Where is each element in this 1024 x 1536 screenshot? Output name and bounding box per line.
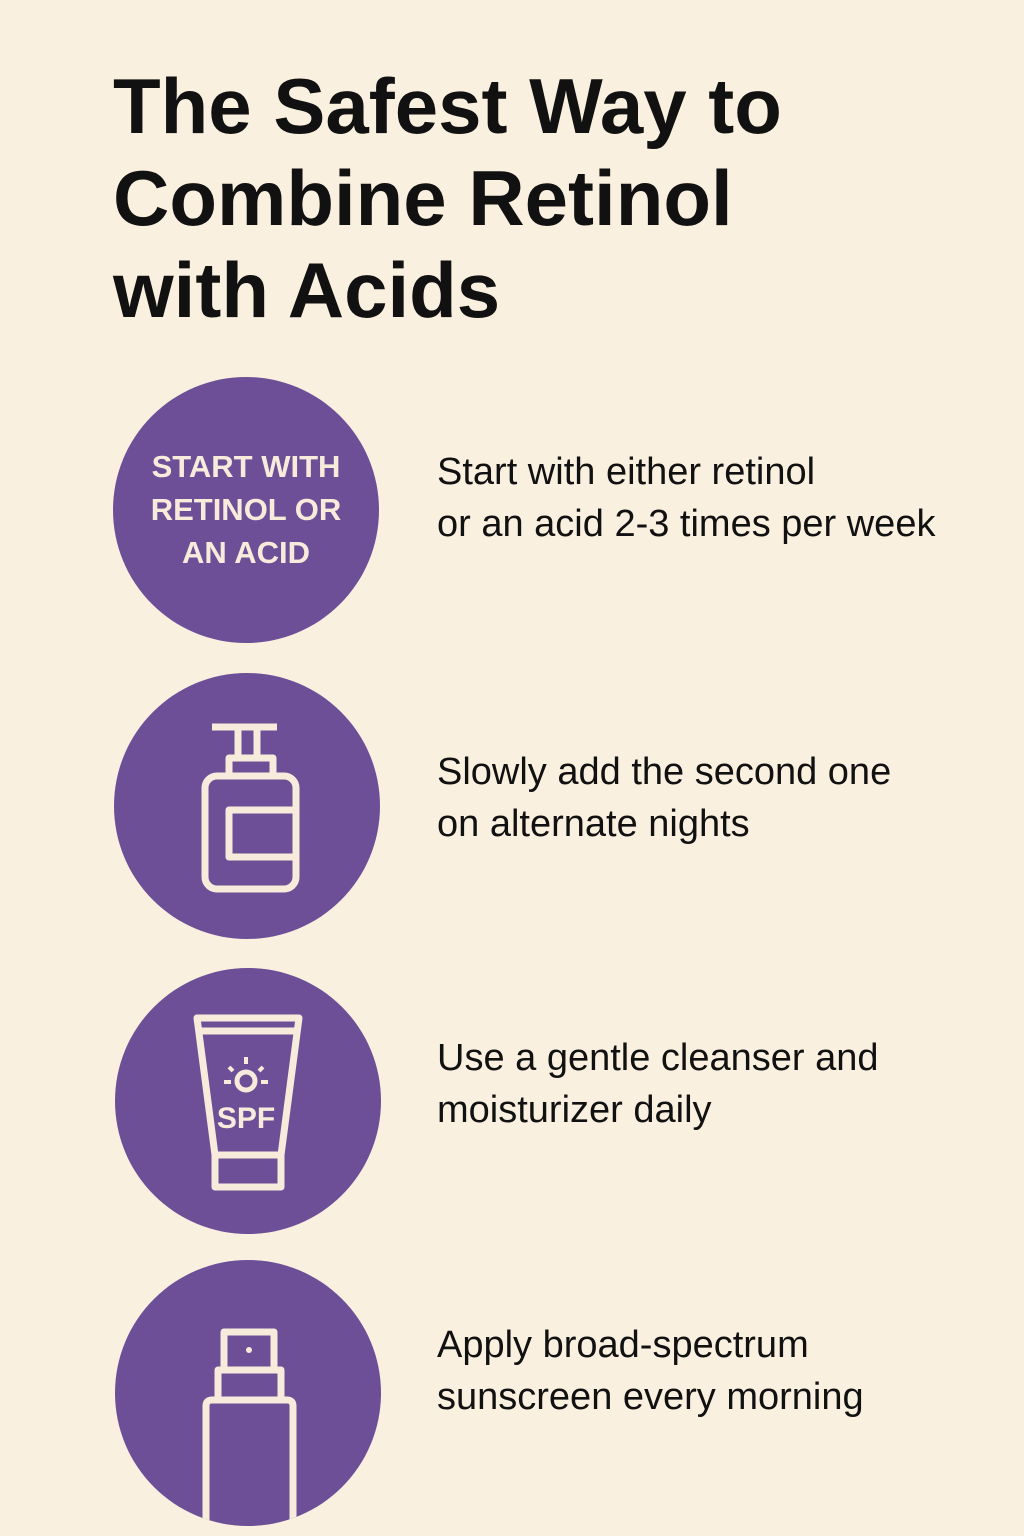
step 4 text: Apply broad-spectrum [437, 1324, 809, 1366]
icons [194, 724, 302, 1520]
step 4 circle [115, 1260, 381, 1526]
step 1 text: Start with either retinol [437, 451, 815, 493]
step 2 text: Slowly add the second one [437, 751, 891, 793]
step 2 text: on alternate nights [437, 803, 750, 845]
step 4 text: sunscreen every morning [437, 1376, 864, 1418]
icon: SPF tube: SPF [217, 1102, 275, 1135]
icon: spray bottle [206, 1332, 293, 1536]
step 1 circle: RETINOL OR [151, 492, 341, 527]
title: The Safest Way to [113, 62, 782, 150]
step 3 text: moisturizer daily [437, 1089, 712, 1131]
step 1 circle [113, 377, 379, 643]
step 2 text [437, 751, 891, 845]
step 2 circle [114, 673, 380, 939]
title [112, 62, 782, 334]
icon: pump bottle [205, 727, 296, 889]
step 1 circle: START WITH [152, 449, 340, 484]
step 3 text [437, 1037, 879, 1131]
title: Combine Retinol [113, 154, 733, 242]
step 1 text [437, 451, 936, 545]
step 3 circle [115, 968, 381, 1234]
step 1 text: or an acid 2-3 times per week [437, 503, 935, 545]
icon: SPF tube [197, 1018, 299, 1187]
step 1 circle: AN ACID [182, 535, 310, 570]
step 3 text: Use a gentle cleanser and [437, 1037, 879, 1079]
title: with Acids [113, 246, 500, 334]
step 4 text [437, 1324, 864, 1418]
